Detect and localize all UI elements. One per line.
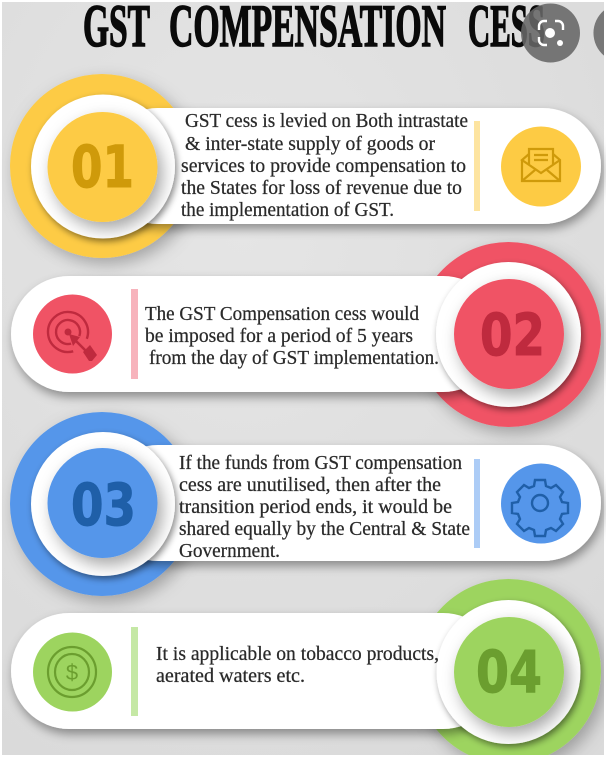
pill 01	[100, 108, 601, 224]
icon: dollar coin: $	[66, 660, 78, 685]
divider 03	[474, 459, 480, 548]
outer ring 01	[10, 74, 194, 258]
text 04	[156, 646, 438, 682]
icon: dollar coin	[33, 632, 112, 712]
text 03: shared equally by the Central & State	[179, 519, 470, 540]
text 01: GST cess is levied on Both intrastate	[185, 111, 468, 132]
text 02: The GST Compensation cess would	[145, 304, 419, 325]
white ring 01	[31, 94, 175, 238]
text 03: cess are unutilised, then after the	[179, 475, 441, 496]
number badge 03	[48, 448, 158, 558]
divider 02	[131, 289, 138, 379]
number badge 02: 02	[480, 301, 545, 369]
panel: step 04	[11, 579, 601, 757]
icon: partial button	[593, 10, 604, 56]
text 04: It is applicable on tobacco products,	[156, 644, 439, 665]
white ring 02	[436, 262, 581, 407]
number badge 02	[454, 279, 564, 389]
divider 04	[131, 627, 138, 716]
pill 03	[100, 445, 601, 561]
white ring 04	[436, 600, 580, 744]
text 03: Government.	[179, 541, 280, 562]
number badge 03: 03	[71, 471, 136, 539]
text 04: aerated waters etc.	[156, 666, 305, 687]
divider 01	[474, 121, 480, 211]
pill 02	[11, 276, 501, 392]
icon: lens button	[521, 4, 580, 62]
icon: gear	[501, 464, 581, 544]
icon: envelope	[501, 126, 581, 206]
text 02	[145, 304, 439, 369]
text 02: from the day of GST implementation.	[149, 348, 439, 369]
number badge 01: 01	[71, 133, 134, 201]
panel: step 03	[10, 412, 601, 596]
icon: target	[33, 294, 112, 374]
number badge 01	[48, 112, 158, 222]
text 01: & inter-state supply of goods or	[185, 134, 436, 155]
outer ring 04	[416, 579, 601, 757]
outer ring 02	[416, 242, 601, 427]
text 03	[179, 453, 470, 562]
panel: step 01	[10, 74, 601, 258]
text 01: services to provide compensation to	[181, 156, 466, 177]
number badge 04: 04	[476, 638, 542, 706]
text 01: the States for loss of revenue due to	[181, 178, 462, 199]
outer ring 03	[10, 412, 194, 596]
text 01	[181, 111, 468, 221]
pill 04	[11, 613, 501, 729]
text 03: transition period ends, it would be	[179, 497, 452, 518]
text 03: If the funds from GST compensation	[179, 453, 462, 474]
text 01: the implementation of GST.	[181, 200, 394, 221]
white ring 03	[31, 432, 175, 576]
panel: step 02	[11, 242, 601, 427]
text 02: be imposed for a period of 5 years	[145, 326, 413, 347]
number badge 04	[454, 617, 564, 727]
